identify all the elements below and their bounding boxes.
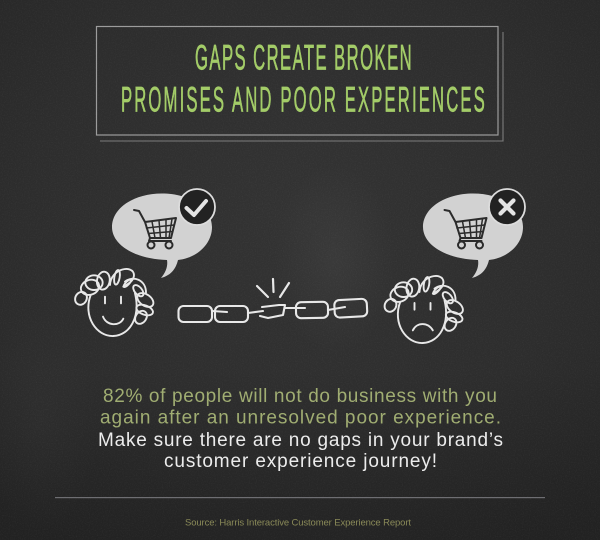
broken chain <box>178 279 367 322</box>
statistic text <box>98 386 503 472</box>
right speech bubble with cart and x <box>423 189 525 278</box>
icon: x badge <box>489 189 525 225</box>
happy face <box>73 269 156 336</box>
statistic text: again after an unresolved poor experience. <box>100 408 501 428</box>
source: Source: Harris Interactive Customer Experience Report <box>185 518 411 528</box>
footer rule <box>55 497 545 498</box>
bubble shape <box>112 194 212 278</box>
icon: shopping cart <box>444 210 486 248</box>
title <box>121 38 485 119</box>
icon: shopping cart <box>134 210 176 248</box>
sad face <box>382 276 465 343</box>
icon: check badge <box>179 189 215 225</box>
statistic text: customer experience journey! <box>164 451 437 472</box>
title: GAPS CREATE BROKEN <box>195 38 412 77</box>
bubble shape <box>423 194 523 278</box>
left speech bubble with cart and check <box>112 189 215 278</box>
title: PROMISES AND POOR EXPERIENCES <box>121 80 485 119</box>
statistic text: Make sure there are no gaps in your brand’s <box>98 430 503 451</box>
icon: break sparks <box>257 279 289 297</box>
title frame <box>96 26 503 141</box>
statistic text: 82% of people will not do business with you <box>103 386 497 407</box>
